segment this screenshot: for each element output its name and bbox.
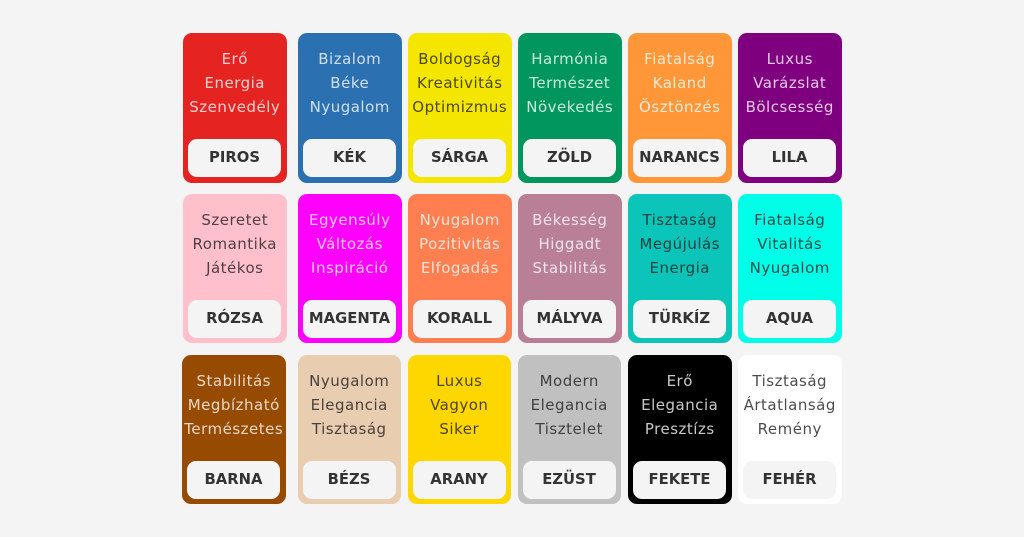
card: MÁLYVA (518, 194, 622, 343)
card: FEHÉR: Remény (758, 420, 822, 438)
card: KÉK (298, 33, 402, 183)
card: BARNA: Megbízható (188, 396, 280, 414)
card: SÁRGA: SÁRGA (431, 149, 488, 166)
card: NARANCS: Ösztönzés (639, 98, 720, 116)
card: KORALL: KORALL (427, 310, 492, 327)
card: RÓZSA: Játékos (206, 259, 263, 277)
card: ZÖLD: Növekedés (526, 98, 613, 116)
card: ARANY: ARANY (430, 471, 488, 488)
card: FEHÉR (738, 355, 842, 504)
card: EZÜST: EZÜST (542, 471, 596, 488)
card: KÉK: Nyugalom (310, 98, 390, 116)
card: EZÜST: Modern (540, 372, 599, 390)
card: ZÖLD: ZÖLD (547, 149, 592, 166)
card: MÁLYVA: MÁLYVA (537, 310, 602, 327)
card: ZÖLD (518, 33, 622, 183)
card: AQUA: AQUA (766, 310, 813, 327)
card: EZÜST: Tisztelet (536, 420, 603, 438)
card: AQUA: Fiatalság (754, 210, 825, 228)
card: PIROS: Szenvedély (189, 98, 280, 116)
card: SÁRGA: Boldogság (418, 50, 501, 68)
card: PIROS (183, 33, 286, 183)
card: SÁRGA: Optimizmus (412, 98, 507, 116)
card: KORALL (408, 194, 512, 343)
card: FEKETE (628, 355, 732, 504)
card: ARANY: Siker (439, 420, 479, 438)
card: LILA: Luxus (767, 50, 813, 68)
card: FEHÉR: Tisztaság (752, 372, 827, 390)
card: KORALL: Pozitivitás (419, 235, 500, 253)
card: MÁLYVA: Higgadt (538, 235, 601, 253)
card: TÜRKÍZ: TÜRKÍZ (649, 310, 710, 327)
card: ARANY: Luxus (436, 372, 482, 390)
card: MAGENTA: Egyensúly (309, 210, 390, 228)
card: BARNA (182, 355, 286, 504)
card: FEKETE: Presztízs (645, 420, 715, 438)
card: FEKETE: Elegancia (641, 396, 718, 414)
card: PIROS: PIROS (209, 149, 260, 166)
card: KÉK: Bizalom (318, 50, 381, 68)
card: KÉK: Béke (330, 74, 369, 92)
card: BARNA: Természetes (184, 420, 283, 438)
card: MÁLYVA: Stabilitás (532, 259, 607, 277)
card: FEKETE: Erő (667, 372, 693, 390)
card: BÉZS: Elegancia (311, 396, 388, 414)
card: AQUA: Nyugalom (750, 259, 830, 277)
card: LILA: LILA (772, 149, 807, 166)
card: ARANY: Vagyon (430, 396, 488, 414)
card: RÓZSA (183, 194, 286, 343)
card: NARANCS: NARANCS (639, 149, 720, 166)
card: TÜRKÍZ: Megújulás (639, 235, 720, 253)
card: RÓZSA: RÓZSA (206, 310, 263, 327)
card: FEKETE: FEKETE (648, 471, 710, 488)
card: MÁLYVA: Békesség (532, 210, 607, 228)
card: LILA (738, 33, 842, 183)
card: TÜRKÍZ: Energia (650, 259, 710, 277)
card: LILA: Varázslat (753, 74, 826, 92)
card: MAGENTA: Változás (317, 235, 383, 253)
card: MAGENTA (298, 194, 402, 343)
card: ZÖLD: Harmónia (531, 50, 608, 68)
card: EZÜST (518, 355, 621, 504)
card: TÜRKÍZ: Tisztaság (642, 210, 717, 228)
card: EZÜST: Elegancia (531, 396, 608, 414)
card: LILA: Bölcsesség (746, 98, 834, 116)
card: TÜRKÍZ (628, 194, 732, 343)
card: RÓZSA: Szeretet (201, 210, 268, 228)
card: MAGENTA: Inspiráció (311, 259, 388, 277)
card: BARNA: Stabilitás (196, 372, 271, 390)
card: RÓZSA: Romantika (193, 235, 277, 253)
card: SÁRGA: Kreativitás (417, 74, 503, 92)
card: SÁRGA (408, 33, 512, 183)
card: AQUA (738, 194, 842, 343)
card: NARANCS (628, 33, 732, 183)
card: BÉZS: Tisztaság (312, 420, 387, 438)
card: KORALL: Elfogadás (421, 259, 499, 277)
card: ZÖLD: Természet (529, 74, 610, 92)
card: FEHÉR: FEHÉR (762, 471, 817, 488)
card: BARNA: BARNA (205, 471, 262, 488)
card: BÉZS: Nyugalom (309, 372, 389, 390)
card: BÉZS (298, 355, 401, 504)
card: NARANCS: Kaland (653, 74, 707, 92)
card: KÉK: KÉK (333, 149, 366, 166)
card: ARANY (408, 355, 511, 504)
card: MAGENTA: MAGENTA (309, 310, 390, 327)
card: NARANCS: Fiatalság (644, 50, 715, 68)
card: BÉZS: BÉZS (328, 471, 370, 488)
card: AQUA: Vitalitás (757, 235, 822, 253)
card: KORALL: Nyugalom (420, 210, 500, 228)
card: FEHÉR: Ártatlanság (744, 396, 836, 414)
card: PIROS: Energia (204, 74, 265, 92)
card: PIROS: Erő (222, 50, 248, 68)
